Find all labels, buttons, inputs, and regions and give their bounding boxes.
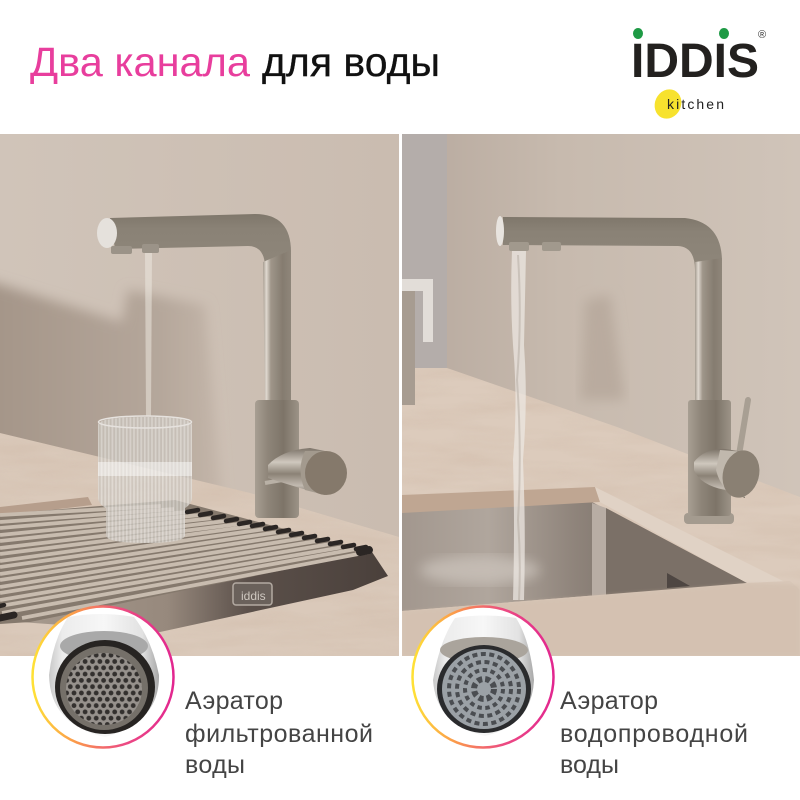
stone diagonal edge: [595, 487, 785, 583]
gradient ring badge: [32, 606, 174, 748]
text: filtered water aerator caption: воды: [185, 751, 245, 779]
text: tap water aerator caption: [560, 687, 748, 779]
handle shoulder: [694, 449, 745, 498]
lever rod: [264, 480, 282, 485]
sink logo plate: [233, 583, 272, 605]
glass ribs: [98, 417, 192, 543]
text: filtered water aerator caption: Аэратор: [185, 687, 283, 715]
aerator cell rings: [449, 654, 519, 724]
aerator grey insert: [442, 649, 526, 729]
kitchen label: kitchen: [667, 96, 724, 112]
wall: [447, 134, 800, 497]
sink logo plate: iddis: [241, 589, 266, 603]
faucet body: [97, 214, 347, 518]
stone front edge: [402, 487, 600, 513]
white background object: [402, 279, 433, 342]
ribbed glass: [98, 416, 192, 543]
countertop: [402, 368, 800, 611]
aerator nozzles: [111, 244, 159, 254]
base collar: [255, 400, 299, 518]
aerator chrome body: [433, 616, 534, 736]
photo panel: tap water faucet: [402, 134, 800, 656]
base collar: [688, 400, 731, 516]
text: tap water aerator caption: Аэратор: [560, 687, 658, 715]
title: для воды: [262, 39, 440, 85]
sink logo plate: [667, 573, 690, 588]
gradient ring badge: [412, 606, 554, 748]
sink basin: [24, 552, 388, 632]
countertop: [0, 433, 399, 656]
callout: filtered water aerator: [32, 606, 174, 748]
text: filtered water aerator caption: [185, 687, 373, 779]
yellow blob: [650, 85, 686, 123]
rack bars: [0, 506, 369, 618]
sink highlight: [420, 556, 540, 584]
registered mark: ®: [758, 29, 766, 41]
handle shoulder: [268, 448, 325, 495]
stream ripple: [517, 255, 520, 600]
front countertop texture: [402, 583, 800, 656]
logo: IDDIS kitchen: [631, 28, 766, 123]
lever: [739, 400, 748, 455]
aerator chrome body: [49, 614, 159, 737]
aerator honeycomb mesh: [66, 653, 142, 725]
riser pipe: [695, 258, 722, 402]
glass body: [98, 417, 192, 543]
background bottle: [402, 290, 415, 405]
stone texture: [464, 406, 530, 460]
base flange: [684, 513, 734, 524]
aerator shoulder band: [60, 631, 148, 661]
wall shadow: [0, 278, 222, 500]
sink right wall: [606, 508, 747, 597]
logo green dots: [633, 28, 729, 39]
photo panel: filtered water faucet: [0, 134, 399, 656]
aerator nozzles: [509, 242, 561, 251]
handle cap side: [300, 451, 325, 495]
wall: [0, 134, 399, 537]
text: tap water aerator caption: водопроводной: [560, 720, 748, 748]
text: filtered water aerator caption: фильтрованной: [185, 720, 373, 748]
aerator dark ring: [437, 645, 531, 733]
aerator dark ring: [55, 640, 155, 734]
water stream: [145, 253, 152, 416]
callout: tap water aerator: [412, 606, 554, 748]
stream body: [511, 251, 526, 600]
handle front disc: [305, 451, 347, 495]
spout end cap: [496, 216, 504, 246]
rack: [0, 500, 372, 624]
aerator inner ring: [60, 646, 148, 730]
sink edge: [0, 497, 92, 514]
text: tap water aerator caption: воды: [560, 751, 619, 779]
faucet body: [496, 216, 765, 524]
spout: [110, 214, 291, 262]
front countertop: [402, 581, 800, 656]
handle cap side: [716, 450, 745, 497]
riser pipe: [263, 250, 291, 402]
grey side wall: [402, 134, 442, 368]
title: Два канала: [30, 39, 250, 85]
stone texture: [0, 433, 399, 656]
aerator shoulder band: [440, 637, 528, 663]
spout: [503, 217, 722, 402]
title: [30, 39, 440, 85]
handle front disc: [717, 446, 765, 502]
spout end cap: [97, 218, 117, 248]
water level: [98, 462, 192, 476]
faucet shadow on wall: [580, 295, 625, 400]
rack end caps: [0, 510, 369, 618]
sink corner: [592, 503, 606, 598]
rack underlay: [0, 500, 372, 624]
sink basin: [402, 502, 747, 611]
water stream: [511, 251, 526, 600]
logo wordmark: IDDIS: [631, 35, 759, 88]
glass rim: [98, 416, 192, 428]
